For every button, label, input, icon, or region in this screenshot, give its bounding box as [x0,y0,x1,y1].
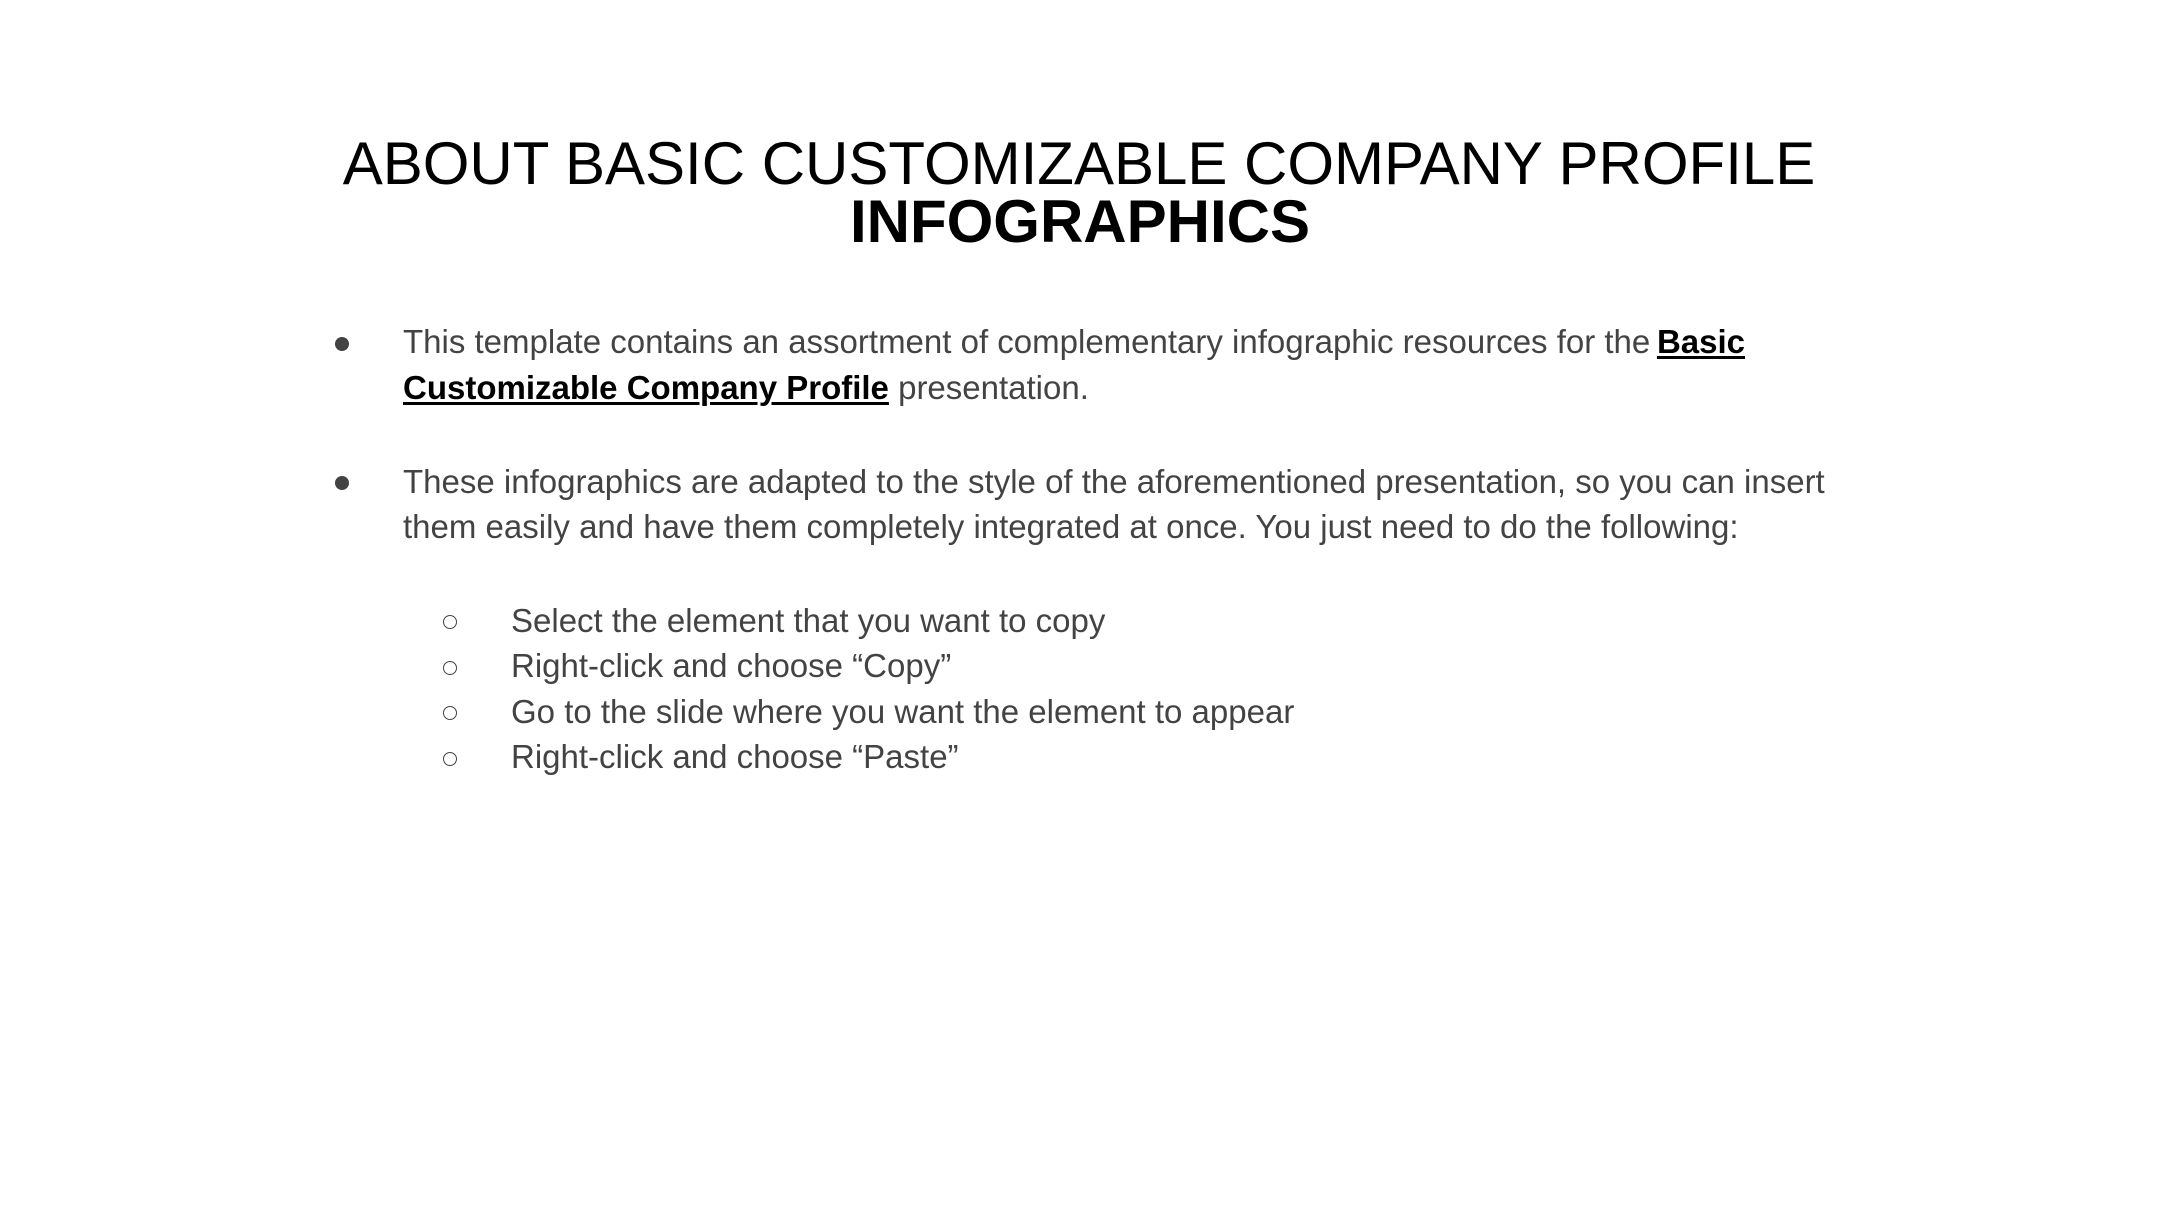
sub-bullet marker 1 [443,615,457,629]
bullet 1 line 1: This template contains an assortment of complementary infographic resources for the Basic [403,323,1745,360]
sub-bullet text 2: Right-click and choose “Copy” [511,647,951,684]
bullet list [335,323,1825,775]
bullet marker 1 [335,337,349,351]
sub-bullet marker 4 [443,752,457,766]
sub-bullet marker 3 [443,706,457,720]
sub-bullet text 3: Go to the slide where you want the element to appear [511,693,1294,730]
bullet 2 line 1: These infographics are adapted to the style of the aforementioned presentation, so you can insert [403,463,1825,500]
bullet 2 line 2: them easily and have them completely integrated at once. You just need to do the following: [403,508,1739,545]
bullet 1 line 2: Customizable Company Profile presentation. [403,369,1089,406]
bullet marker 2 [335,476,349,490]
sub-bullet text 4: Right-click and choose “Paste” [511,738,959,775]
title [342,130,1815,255]
sub-bullet marker 2 [443,661,457,675]
title line 1: ABOUT BASIC CUSTOMIZABLE COMPANY PROFILE [343,130,1815,197]
sub-bullet text 1: Select the element that you want to copy [511,602,1105,639]
title line 2: INFOGRAPHICS [850,188,1310,255]
